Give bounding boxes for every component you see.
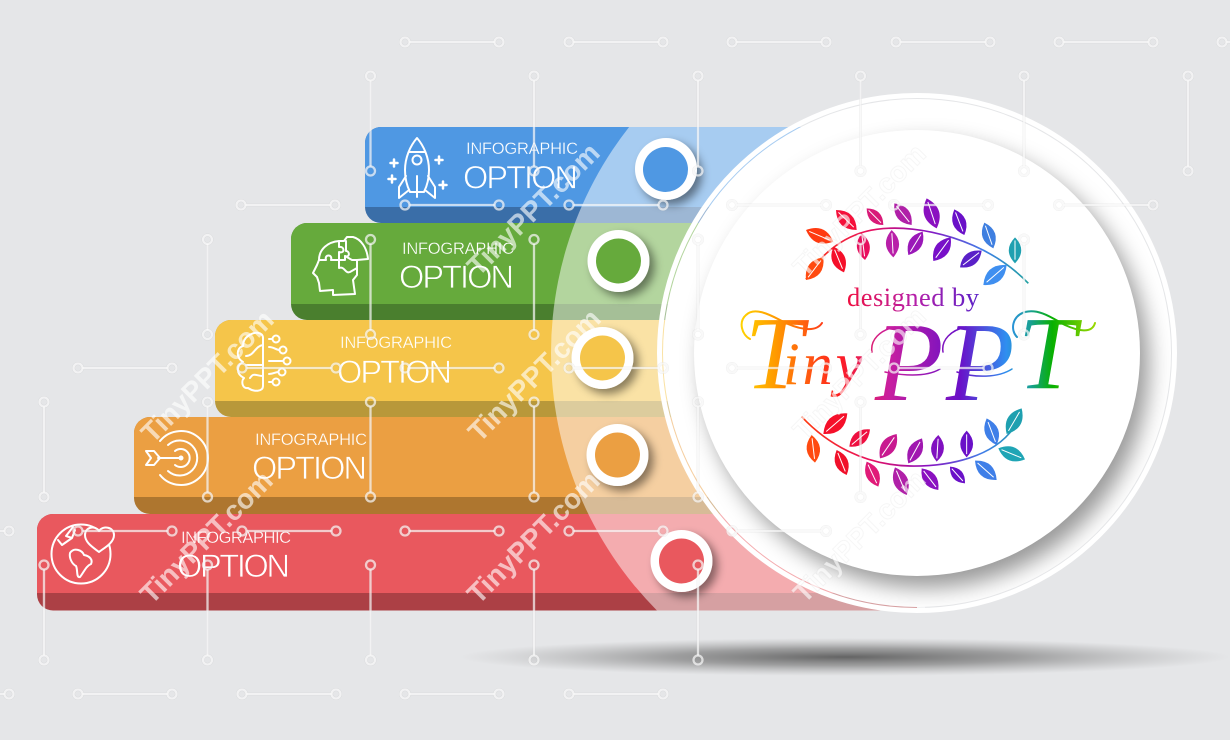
Tiny PPT lettering: T	[1018, 296, 1082, 411]
node: green	[588, 230, 650, 292]
node: orange	[586, 424, 648, 486]
text: green option: OPTION	[399, 259, 514, 295]
text: yellow option	[337, 334, 452, 390]
text: blue option	[463, 140, 578, 196]
text: blue option: INFOGRAPHIC	[466, 140, 578, 158]
Tiny PPT lettering: P	[874, 301, 943, 425]
text: red option: INFOGRAPHIC	[181, 529, 291, 547]
panel: red bar	[37, 514, 917, 610]
panel: orange bar	[134, 417, 917, 514]
ground shadow	[460, 638, 1230, 676]
text: orange option: OPTION	[252, 450, 367, 486]
panel: yellow bar	[215, 320, 917, 417]
designed by: designed by	[847, 282, 980, 312]
Tiny PPT lettering: iny	[783, 331, 865, 397]
lower laurel	[802, 405, 1028, 498]
white ring and disc	[660, 96, 1174, 610]
panel: blue bar	[365, 127, 917, 223]
text: green option: INFOGRAPHIC	[402, 240, 514, 258]
text: orange option: INFOGRAPHIC	[255, 431, 367, 449]
icon: head with puzzle	[313, 237, 368, 295]
Tiny PPT lettering: T	[745, 296, 809, 411]
watermarks: TinyPPT.com	[787, 301, 932, 446]
Tiny PPT lettering: P	[945, 301, 1014, 425]
text: yellow option: OPTION	[337, 354, 452, 390]
panel: green bar	[291, 223, 917, 320]
text: yellow option: INFOGRAPHIC	[340, 334, 452, 352]
text: green option	[399, 240, 514, 295]
icon: brain circuit	[238, 333, 290, 391]
translucent overlay circle	[551, 127, 925, 610]
Tiny PPT lettering	[742, 296, 1095, 425]
icon: target with arrow	[146, 431, 208, 485]
watermarks	[134, 137, 932, 610]
watermarks: TinyPPT.com	[787, 464, 932, 609]
text: orange option	[252, 431, 367, 486]
logo: TinyPPT	[742, 196, 1095, 498]
icon: globe with heart	[52, 524, 114, 584]
watermarks: TinyPPT.com	[461, 465, 606, 610]
text: red option	[177, 529, 291, 584]
node: yellow	[572, 327, 634, 389]
icon: rocket	[388, 138, 446, 198]
node: blue	[635, 138, 697, 200]
upper laurel	[801, 196, 1028, 291]
text: blue option: OPTION	[463, 160, 578, 196]
text: red option: OPTION	[177, 548, 290, 584]
watermarks: TinyPPT.com	[134, 465, 279, 610]
node: red	[650, 530, 712, 592]
watermarks: TinyPPT.com	[787, 138, 932, 283]
watermarks: TinyPPT.com	[462, 303, 607, 448]
watermarks: TinyPPT.com	[135, 304, 280, 449]
watermarks: TinyPPT.com	[461, 137, 606, 282]
